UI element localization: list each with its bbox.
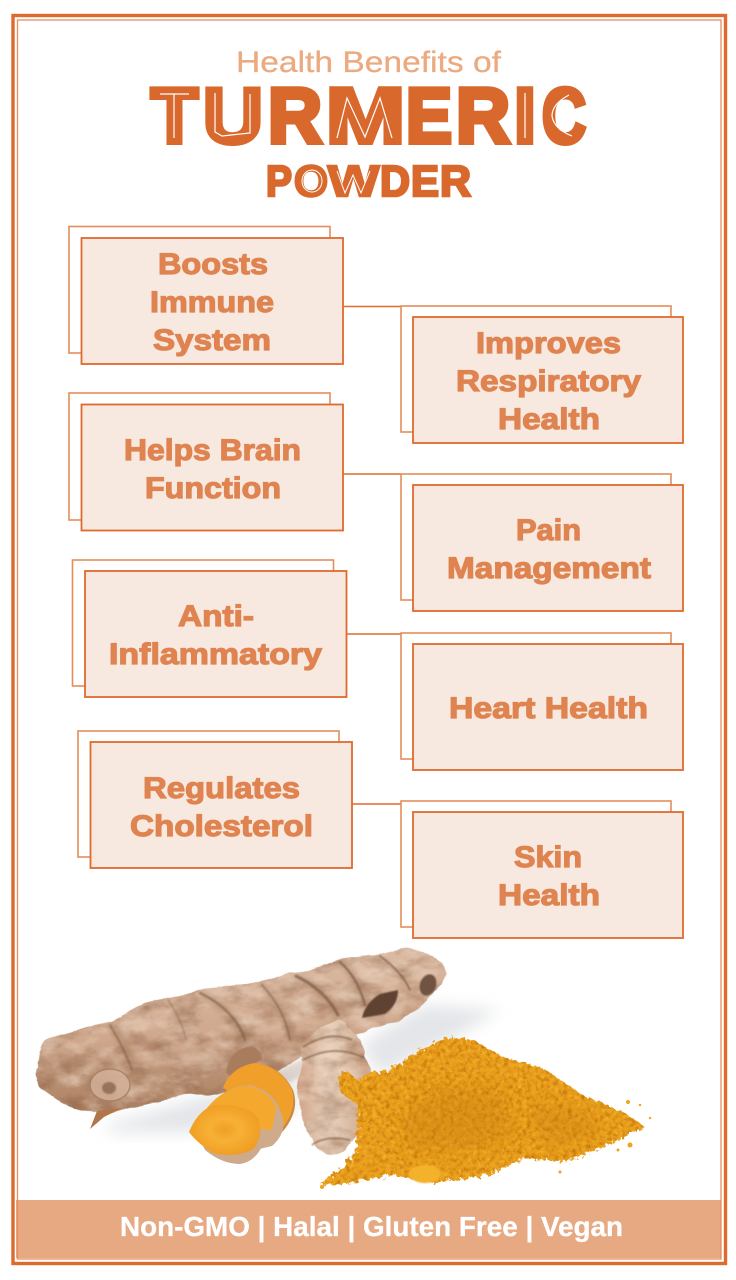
- card: Anti-Inflammatory: [72, 560, 346, 697]
- title line: Turmeric: R: [456, 72, 510, 160]
- title line: Powder: O: [294, 157, 328, 206]
- title line: Turmeric: E: [406, 72, 452, 160]
- illustration: turmeric root and powder: [36, 948, 651, 1189]
- back slice: [223, 1063, 295, 1145]
- card: Anti-Inflammatory: Anti-: [178, 600, 254, 633]
- card: Boosts Immune System: Immune: [150, 286, 274, 319]
- card: Skin Health: [401, 801, 683, 938]
- title block: [151, 46, 586, 206]
- root body: [36, 948, 446, 1114]
- bottom certification band: [16, 1200, 721, 1258]
- title line: Turmeric: I: [514, 72, 536, 160]
- card: Boosts Immune System: System: [153, 324, 271, 357]
- title line: Powder: E: [411, 157, 439, 206]
- card: Improves Respiratory Health: Respiratory: [456, 365, 641, 398]
- title line: Powder: D: [380, 157, 410, 206]
- cast shadows: [105, 1005, 500, 1132]
- title line: Powder: W: [328, 157, 380, 206]
- root knots: [90, 972, 439, 1129]
- card: Improves Respiratory Health: Health: [498, 403, 600, 436]
- title line: Powder: P: [266, 157, 292, 206]
- card: Skin Health: Health: [498, 879, 600, 912]
- title line: Powder: R: [440, 157, 471, 206]
- middle slice: [207, 1085, 284, 1150]
- card: Regulates Cholesterol: Regulates: [143, 772, 300, 805]
- card: Regulates Cholesterol: [78, 731, 352, 868]
- front slice: [200, 1120, 264, 1164]
- title line: Turmeric: T: [151, 72, 198, 160]
- root soft ring shading: [112, 963, 367, 1092]
- band text: Non-GMO | Halal | Gluten Free | Vegan: [120, 1211, 623, 1242]
- title inline strokes: [160, 93, 572, 193]
- card: Boosts Immune System: Boosts: [158, 248, 268, 281]
- title line: Health Benefits of: Health Benefits of: [236, 46, 502, 79]
- card: Pain Management: [401, 474, 683, 611]
- powder specks: [320, 1100, 651, 1189]
- card: Pain Management: Management: [447, 552, 651, 585]
- card: Helps Brain Function: [69, 393, 343, 530]
- card: Pain Management: Pain: [516, 514, 581, 547]
- card: Regulates Cholesterol: Cholesterol: [130, 810, 313, 843]
- connector lines: [343, 306, 401, 804]
- title line: Turmeric: U: [203, 72, 263, 160]
- turmeric slices: [189, 1063, 295, 1164]
- title line: Turmeric: M: [326, 72, 405, 160]
- card: Anti-Inflammatory: Inflammatory: [109, 638, 322, 671]
- powder shading: [400, 1085, 600, 1150]
- card: Heart Health: [401, 633, 683, 770]
- powder clump: [409, 1165, 441, 1183]
- card: Helps Brain Function: Helps Brain: [124, 434, 301, 467]
- powder pile: [320, 1037, 645, 1185]
- title line: Turmeric: C: [542, 72, 586, 160]
- card: Improves Respiratory Health: Improves: [476, 327, 621, 360]
- root rings and dark creases: [110, 956, 410, 1070]
- root branch: [296, 1018, 372, 1156]
- card: Improves Respiratory Health: [401, 306, 683, 443]
- card: Helps Brain Function: Function: [145, 472, 281, 505]
- card: Heart Health: Heart Health: [449, 692, 648, 725]
- card: Skin Health: Skin: [514, 841, 582, 874]
- title line: Turmeric: R: [268, 72, 322, 160]
- card: Boosts Immune System: [69, 226, 343, 364]
- branch creases: [303, 1036, 364, 1145]
